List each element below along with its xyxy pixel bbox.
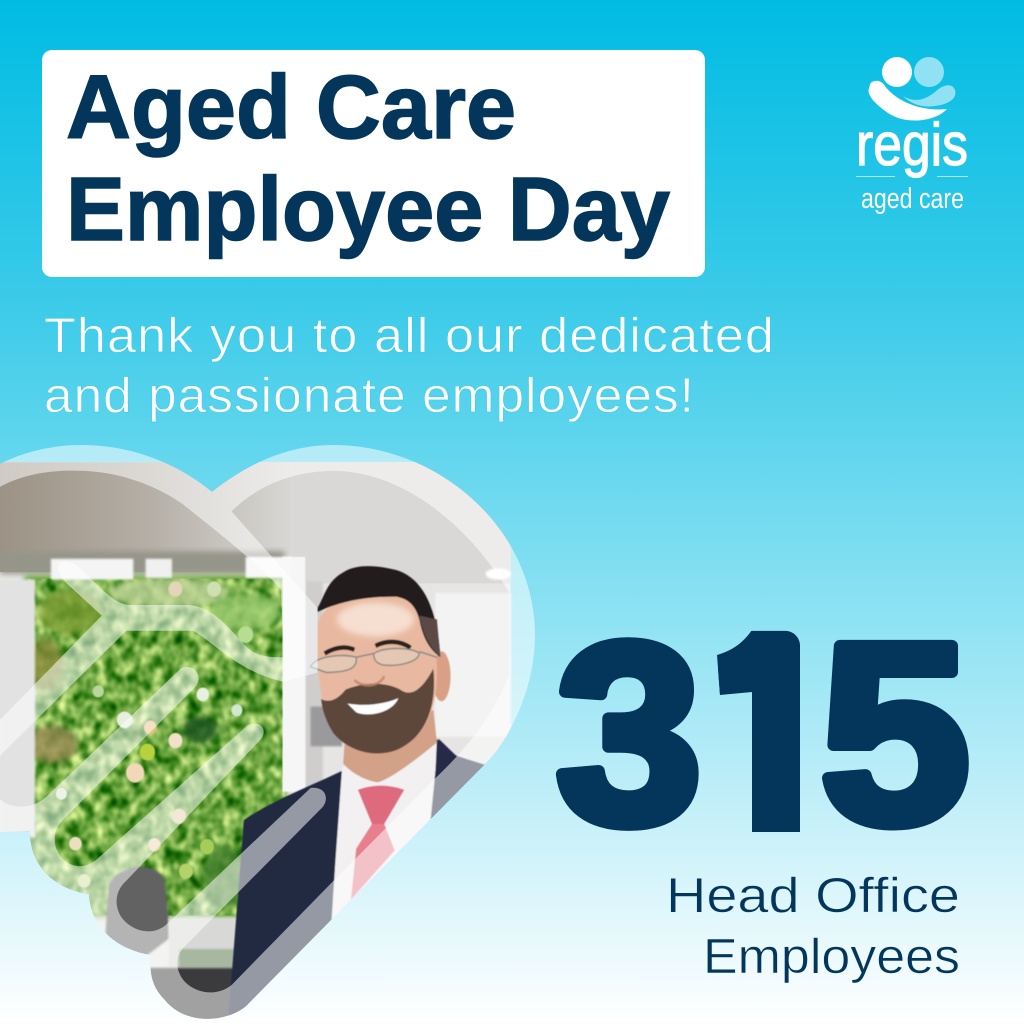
tie — [351, 786, 404, 900]
smile — [347, 698, 398, 714]
subtitle: thank you message: Thank you to all our dedicated — [44, 309, 775, 363]
logo tagline: aged care: aged care — [861, 183, 964, 215]
employee portrait — [228, 566, 486, 1021]
big number: 315 — [556, 630, 969, 832]
suit — [228, 739, 486, 1021]
nose shadow — [354, 676, 384, 685]
chair and desk — [105, 867, 246, 1024]
subtitle: thank you message — [44, 309, 775, 423]
white column and left panel — [0, 557, 305, 837]
title line: Employee Day: Employee Day — [66, 160, 670, 260]
green living wall — [25, 576, 286, 917]
subtitle: thank you message: and passionate employees! — [44, 369, 695, 423]
lapel — [435, 738, 440, 768]
big number: 315: 3 — [556, 591, 702, 877]
hair — [318, 566, 440, 657]
big number: 315: 5 — [820, 591, 970, 877]
heart photo panel — [0, 440, 540, 1024]
caption: Head Office Employees — [666, 869, 960, 984]
right ear — [432, 651, 451, 701]
logo icon: two figures embracing — [869, 57, 955, 121]
logo rule — [856, 176, 968, 178]
eyebrows — [325, 642, 411, 653]
logo: regis aged care — [856, 57, 968, 215]
title line: Aged Care: Aged Care — [66, 58, 516, 158]
caption: Head Office Employees: Head Office — [666, 869, 960, 923]
neck — [343, 710, 437, 782]
title panel — [42, 50, 705, 277]
face — [317, 596, 438, 732]
photo background — [0, 462, 511, 1024]
translucent heart hand overlay — [0, 440, 540, 1024]
beard — [321, 669, 434, 754]
photo: office and employee portrait — [0, 462, 511, 1024]
big number: 315: 1 — [692, 591, 832, 877]
glasses — [311, 648, 437, 672]
caption: Head Office Employees: Employees — [703, 930, 960, 984]
logo wordmark: regis: regis — [856, 111, 968, 178]
shirt — [332, 739, 439, 922]
